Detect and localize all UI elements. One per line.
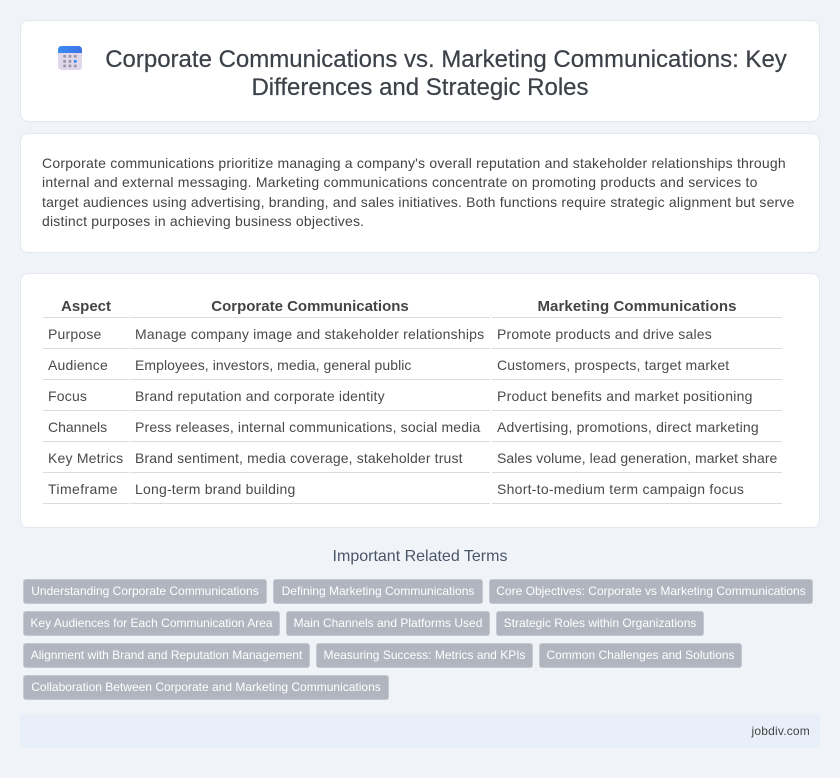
icon: calendar xyxy=(58,46,82,70)
tag group: related terms xyxy=(23,579,813,700)
row: Timeframe: Short-to-medium term campaign focus xyxy=(497,481,744,497)
row: Channels: Channels xyxy=(48,419,107,435)
row: Audience: Customers, prospects, target market xyxy=(497,357,729,373)
panel: introduction: target audiences using advertising, branding, and sales initiatives. Both functions require strategic alignment but serve xyxy=(42,194,795,210)
panel: introduction: distinct purposes in achieving business objectives. xyxy=(42,213,364,229)
footer xyxy=(20,714,820,748)
panel: introduction: Corporate communications prioritize managing a company's overall reputation and stakeholder relationships through xyxy=(42,155,786,171)
title: Differences and Strategic Roles xyxy=(251,74,589,101)
tag group: related terms: Defining Marketing Communications xyxy=(282,584,474,598)
tag group: related terms: Understanding Corporate Communications xyxy=(31,584,259,598)
row: Audience: Audience xyxy=(48,357,108,373)
row: Audience: Employees, investors, media, general public xyxy=(135,357,412,373)
row: Channels: Advertising, promotions, direct marketing xyxy=(497,419,759,435)
row: Channels xyxy=(43,419,782,442)
row: Focus: Product benefits and market positioning xyxy=(497,388,753,404)
table header xyxy=(43,298,782,318)
panel: introduction: internal and external messaging. Marketing communications concentrate on promoting products and services to xyxy=(42,174,758,190)
title: Corporate Communications vs. Marketing Communications: Key xyxy=(105,46,787,73)
row: Key Metrics: Key Metrics xyxy=(48,450,123,466)
row: Purpose: Purpose xyxy=(48,326,102,342)
row: Focus xyxy=(43,388,782,411)
row: Focus: Brand reputation and corporate identity xyxy=(135,388,385,404)
tag group: related terms: Alignment with Brand and Reputation Management xyxy=(31,648,302,662)
table header: Marketing Communications xyxy=(537,298,737,315)
table header: Aspect xyxy=(61,298,111,315)
tag group: related terms: Collaboration Between Corporate and Marketing Communications xyxy=(31,680,381,694)
row: Timeframe: Long-term brand building xyxy=(135,481,295,497)
row: Focus: Focus xyxy=(48,388,87,404)
row: Audience xyxy=(43,357,782,380)
tag group: related terms: Common Challenges and Solutions xyxy=(546,648,735,662)
row: Key Metrics: Sales volume, lead generation, market share xyxy=(497,450,777,466)
tag group: related terms: Strategic Roles within Organizations xyxy=(504,616,696,630)
row: Purpose: Promote products and drive sales xyxy=(497,326,712,342)
tag group: related terms: Key Audiences for Each Communication Area xyxy=(30,616,273,630)
footer source text: jobdiv.com xyxy=(752,724,810,738)
panel: introduction xyxy=(20,133,820,253)
panel: title header xyxy=(20,20,820,122)
title xyxy=(105,46,787,101)
row: Channels: Press releases, internal communications, social media xyxy=(135,419,480,435)
row: Timeframe: Timeframe xyxy=(48,481,118,497)
row: Timeframe xyxy=(43,481,782,504)
panel: comparison table xyxy=(20,273,820,528)
tag group: related terms: Main Channels and Platforms Used xyxy=(294,616,482,630)
tag group: related terms: Measuring Success: Metrics and KPIs xyxy=(323,648,526,662)
heading: related terms: Important Related Terms xyxy=(333,548,507,565)
tag group: related terms: Core Objectives: Corporate vs Marketing Communications xyxy=(496,584,806,598)
row: Purpose xyxy=(43,326,782,349)
table header: Corporate Communications xyxy=(211,298,409,315)
row: Purpose: Manage company image and stakeholder relationships xyxy=(135,326,484,342)
row: Key Metrics xyxy=(43,450,782,473)
row: Key Metrics: Brand sentiment, media coverage, stakeholder trust xyxy=(135,450,463,466)
